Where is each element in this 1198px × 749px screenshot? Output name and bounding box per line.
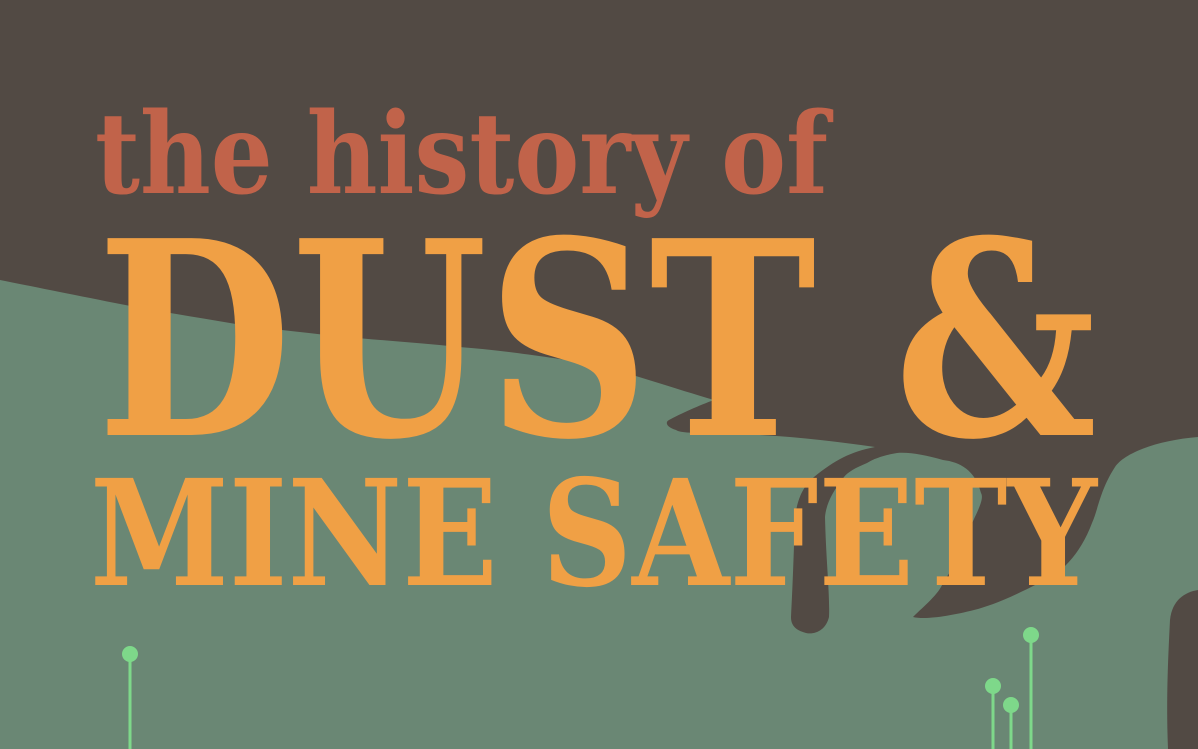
- timeline marker left: [122, 646, 138, 749]
- timeline markers right: [985, 627, 1039, 749]
- title line 1: the history of: [95, 89, 834, 220]
- background: brown right edge strip: [1167, 590, 1198, 749]
